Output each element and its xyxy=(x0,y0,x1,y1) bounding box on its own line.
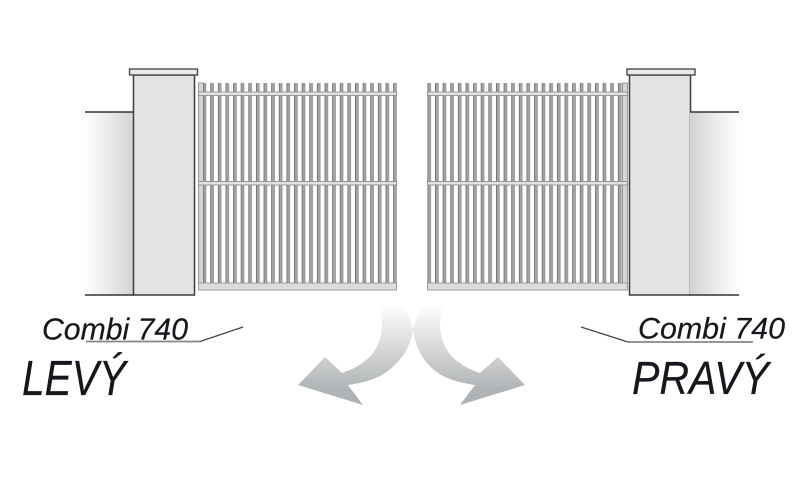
left gate leaf xyxy=(198,83,397,290)
left side heading: LEVÝ xyxy=(22,352,129,406)
right side heading: PRAVÝ xyxy=(632,352,772,404)
right gate leaf xyxy=(427,83,628,290)
right pillar xyxy=(627,69,695,295)
left pillar xyxy=(130,69,198,295)
arrow: left leaf opening direction xyxy=(298,298,413,405)
right label leader line xyxy=(581,327,753,342)
right wall xyxy=(690,112,739,295)
left wall xyxy=(85,112,134,295)
left label leader line xyxy=(86,327,243,342)
arrow: right leaf opening direction xyxy=(413,298,525,405)
left model label: Combi 740 xyxy=(42,312,188,346)
right model label: Combi 740 xyxy=(638,312,785,346)
